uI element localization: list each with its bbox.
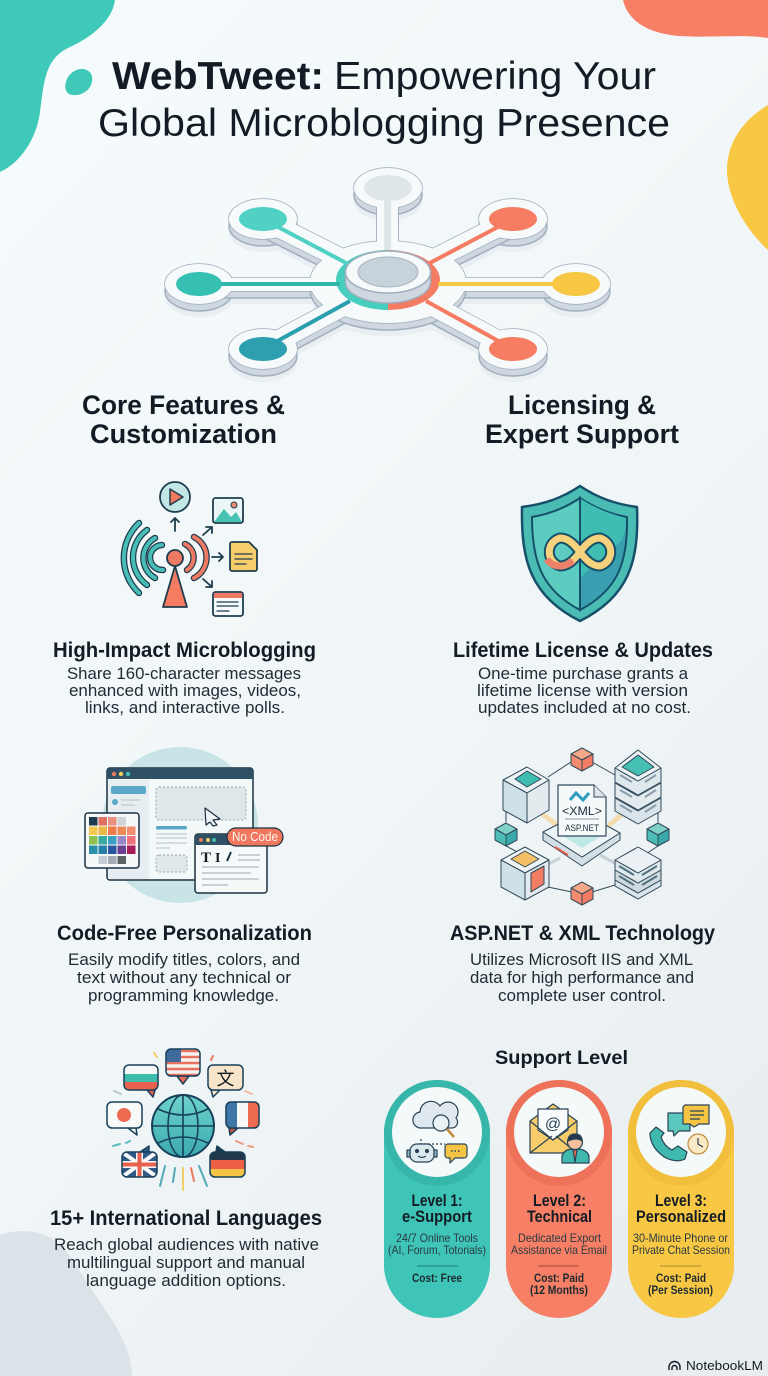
section heading: core features: Core Features & bbox=[82, 390, 285, 420]
text block: international languages bbox=[50, 1207, 322, 1290]
globe bbox=[152, 1095, 214, 1157]
bubble: translate bbox=[208, 1065, 243, 1097]
panel: level 2 support: Cost: Paid bbox=[534, 1271, 584, 1285]
panel: level 3 support: (Per Session) bbox=[648, 1283, 713, 1297]
decorative blob: teal top left bbox=[0, 0, 115, 172]
hub and spoke network diagram bbox=[165, 168, 610, 382]
panel: level 3 support: 30-Minute Phone or bbox=[633, 1231, 728, 1245]
text block: code-free personalization bbox=[57, 922, 312, 1005]
bottom right server stack bbox=[615, 847, 661, 899]
icon: broadcast tower with media bbox=[124, 482, 257, 616]
text block: international languages: 15+ International Languages bbox=[50, 1207, 322, 1230]
panel: level 2 support: Technical bbox=[527, 1207, 592, 1226]
panel: level 2 support bbox=[506, 1080, 612, 1318]
text editor window: T bbox=[201, 850, 211, 866]
title dot bbox=[65, 69, 92, 95]
decorative blob: grey bottom left bbox=[0, 1231, 132, 1376]
text block: high-impact microblogging: Share 160-character messages bbox=[67, 664, 301, 683]
icon: globe with language bubbles bbox=[107, 1049, 259, 1190]
rays bbox=[113, 1053, 253, 1190]
icon: image card bbox=[213, 498, 243, 523]
text block: high-impact microblogging bbox=[53, 639, 316, 717]
text block: lifetime license: One-time purchase grants a bbox=[478, 664, 689, 683]
connector lines bbox=[506, 762, 658, 892]
top left cube bbox=[503, 767, 549, 823]
text block: international languages: language addition options. bbox=[86, 1271, 286, 1290]
coral and yellow nodes bbox=[426, 207, 600, 361]
text block: high-impact microblogging: enhanced with images, videos, bbox=[69, 681, 301, 700]
icon: phone, chat and clock bbox=[650, 1105, 709, 1161]
decorative blob: yellow right bbox=[727, 105, 768, 250]
bubble: bulgaria bbox=[124, 1065, 158, 1097]
text block: high-impact microblogging: links, and interactive polls. bbox=[85, 698, 285, 717]
icon: arrows bbox=[171, 518, 223, 587]
xml document bbox=[558, 785, 606, 836]
panel: level 3 support: Private Chat Session bbox=[632, 1243, 730, 1257]
bubble: translate: 文 bbox=[216, 1069, 234, 1089]
decorative blob: coral top right bbox=[623, 0, 768, 38]
icon: no code customization bbox=[85, 747, 283, 903]
text block: asp.net and xml bbox=[450, 922, 715, 1005]
text block: code-free personalization: Code-Free Personalization bbox=[57, 922, 312, 945]
small cubes bbox=[495, 748, 669, 905]
panel: level 1 support: (AI, Forum, Totorials) bbox=[388, 1243, 486, 1257]
text block: international languages: multilingual support and manual bbox=[67, 1253, 305, 1272]
icon: notebooklm logo bbox=[669, 1362, 680, 1370]
icon: email and agent bbox=[530, 1104, 589, 1163]
panel: level 1 support: Cost: Free bbox=[412, 1271, 462, 1285]
title bbox=[65, 55, 670, 145]
teal nodes bbox=[176, 207, 350, 361]
text block: high-impact microblogging: High-Impact Microblogging bbox=[53, 639, 316, 662]
notebooklm watermark: NotebookLM bbox=[686, 1358, 763, 1373]
icon: shield with infinity bbox=[522, 486, 637, 621]
panel: level 2 support: Level 2: bbox=[533, 1191, 586, 1210]
icon: document bbox=[230, 542, 257, 571]
panel: level 1 support: 24/7 Online Tools bbox=[396, 1231, 478, 1245]
panel: level 1 support: e-Support bbox=[402, 1207, 472, 1226]
bubble: usa bbox=[166, 1049, 200, 1084]
section heading: licensing bbox=[485, 390, 679, 449]
bubble: united kingdom bbox=[122, 1146, 157, 1177]
title: WebTweet: bbox=[112, 55, 324, 98]
icon: email and agent: @ bbox=[545, 1116, 561, 1133]
bubble: japan bbox=[107, 1102, 142, 1135]
colour palette bbox=[85, 813, 139, 868]
cursor bbox=[205, 808, 220, 826]
panel: level 2 support: (12 Months) bbox=[530, 1283, 588, 1297]
browser window bbox=[107, 768, 253, 880]
xml document: <XML> bbox=[562, 804, 602, 818]
text block: lifetime license: lifetime license with version bbox=[477, 681, 688, 700]
section heading: core features: Customization bbox=[90, 419, 277, 449]
panel: level 2 support: Dedicated Export bbox=[518, 1231, 602, 1245]
panel: level 3 support: Level 3: bbox=[655, 1191, 707, 1210]
text block: lifetime license: updates included at no cost. bbox=[478, 698, 691, 717]
title: Empowering Your bbox=[334, 55, 656, 98]
text editor window bbox=[195, 834, 267, 893]
text block: lifetime license: Lifetime License & Updates bbox=[453, 639, 713, 662]
text block: lifetime license bbox=[453, 639, 713, 717]
icon: web window bbox=[213, 592, 243, 616]
text block: asp.net and xml: Utilizes Microsoft IIS and XML bbox=[470, 950, 693, 969]
icon: ASP.NET and XML technology bbox=[495, 748, 669, 905]
text block: international languages: Reach global audiences with native bbox=[54, 1235, 319, 1254]
panel: level 1 support: Level 1: bbox=[412, 1191, 462, 1210]
title: Global Microblogging Presence bbox=[98, 102, 670, 145]
no code badge bbox=[227, 828, 283, 846]
text block: asp.net and xml: complete user control. bbox=[498, 986, 666, 1005]
text block: code-free personalization: Easily modify titles, colors, and bbox=[68, 950, 300, 969]
panel: level 1 support bbox=[384, 1080, 490, 1318]
central platform bbox=[543, 812, 620, 866]
xml document: ASP.NET bbox=[565, 823, 599, 833]
bubble: france bbox=[226, 1102, 259, 1135]
icon: cloud, robot and chat bbox=[407, 1101, 467, 1163]
text editor window: I bbox=[215, 851, 220, 866]
section heading: licensing: Licensing & bbox=[508, 390, 656, 420]
text block: code-free personalization: programming knowledge. bbox=[88, 986, 279, 1005]
top right server stack bbox=[615, 750, 661, 824]
infinity symbol bbox=[547, 538, 611, 566]
section heading: licensing: Expert Support bbox=[485, 419, 679, 449]
icon: play button bbox=[160, 482, 190, 512]
text block: asp.net and xml: ASP.NET & XML Technology bbox=[450, 922, 715, 945]
panel: level 3 support: Personalized bbox=[636, 1207, 726, 1226]
text block: code-free personalization: text without any technical or bbox=[77, 968, 291, 987]
central hub bbox=[346, 251, 430, 303]
no code badge: No Code bbox=[232, 830, 278, 844]
section heading: core features bbox=[82, 390, 285, 449]
heading: support level: Support Level bbox=[495, 1048, 628, 1069]
coloured ring bbox=[336, 250, 440, 310]
bottom left cube bbox=[501, 847, 549, 900]
bubble: germany bbox=[210, 1146, 245, 1177]
panel: level 3 support bbox=[628, 1080, 734, 1318]
panel: level 2 support: Assistance via Email bbox=[511, 1243, 607, 1257]
text block: asp.net and xml: data for high performance and bbox=[470, 968, 694, 987]
top spoke and node bbox=[364, 175, 412, 255]
panel: level 3 support: Cost: Paid bbox=[656, 1271, 706, 1285]
